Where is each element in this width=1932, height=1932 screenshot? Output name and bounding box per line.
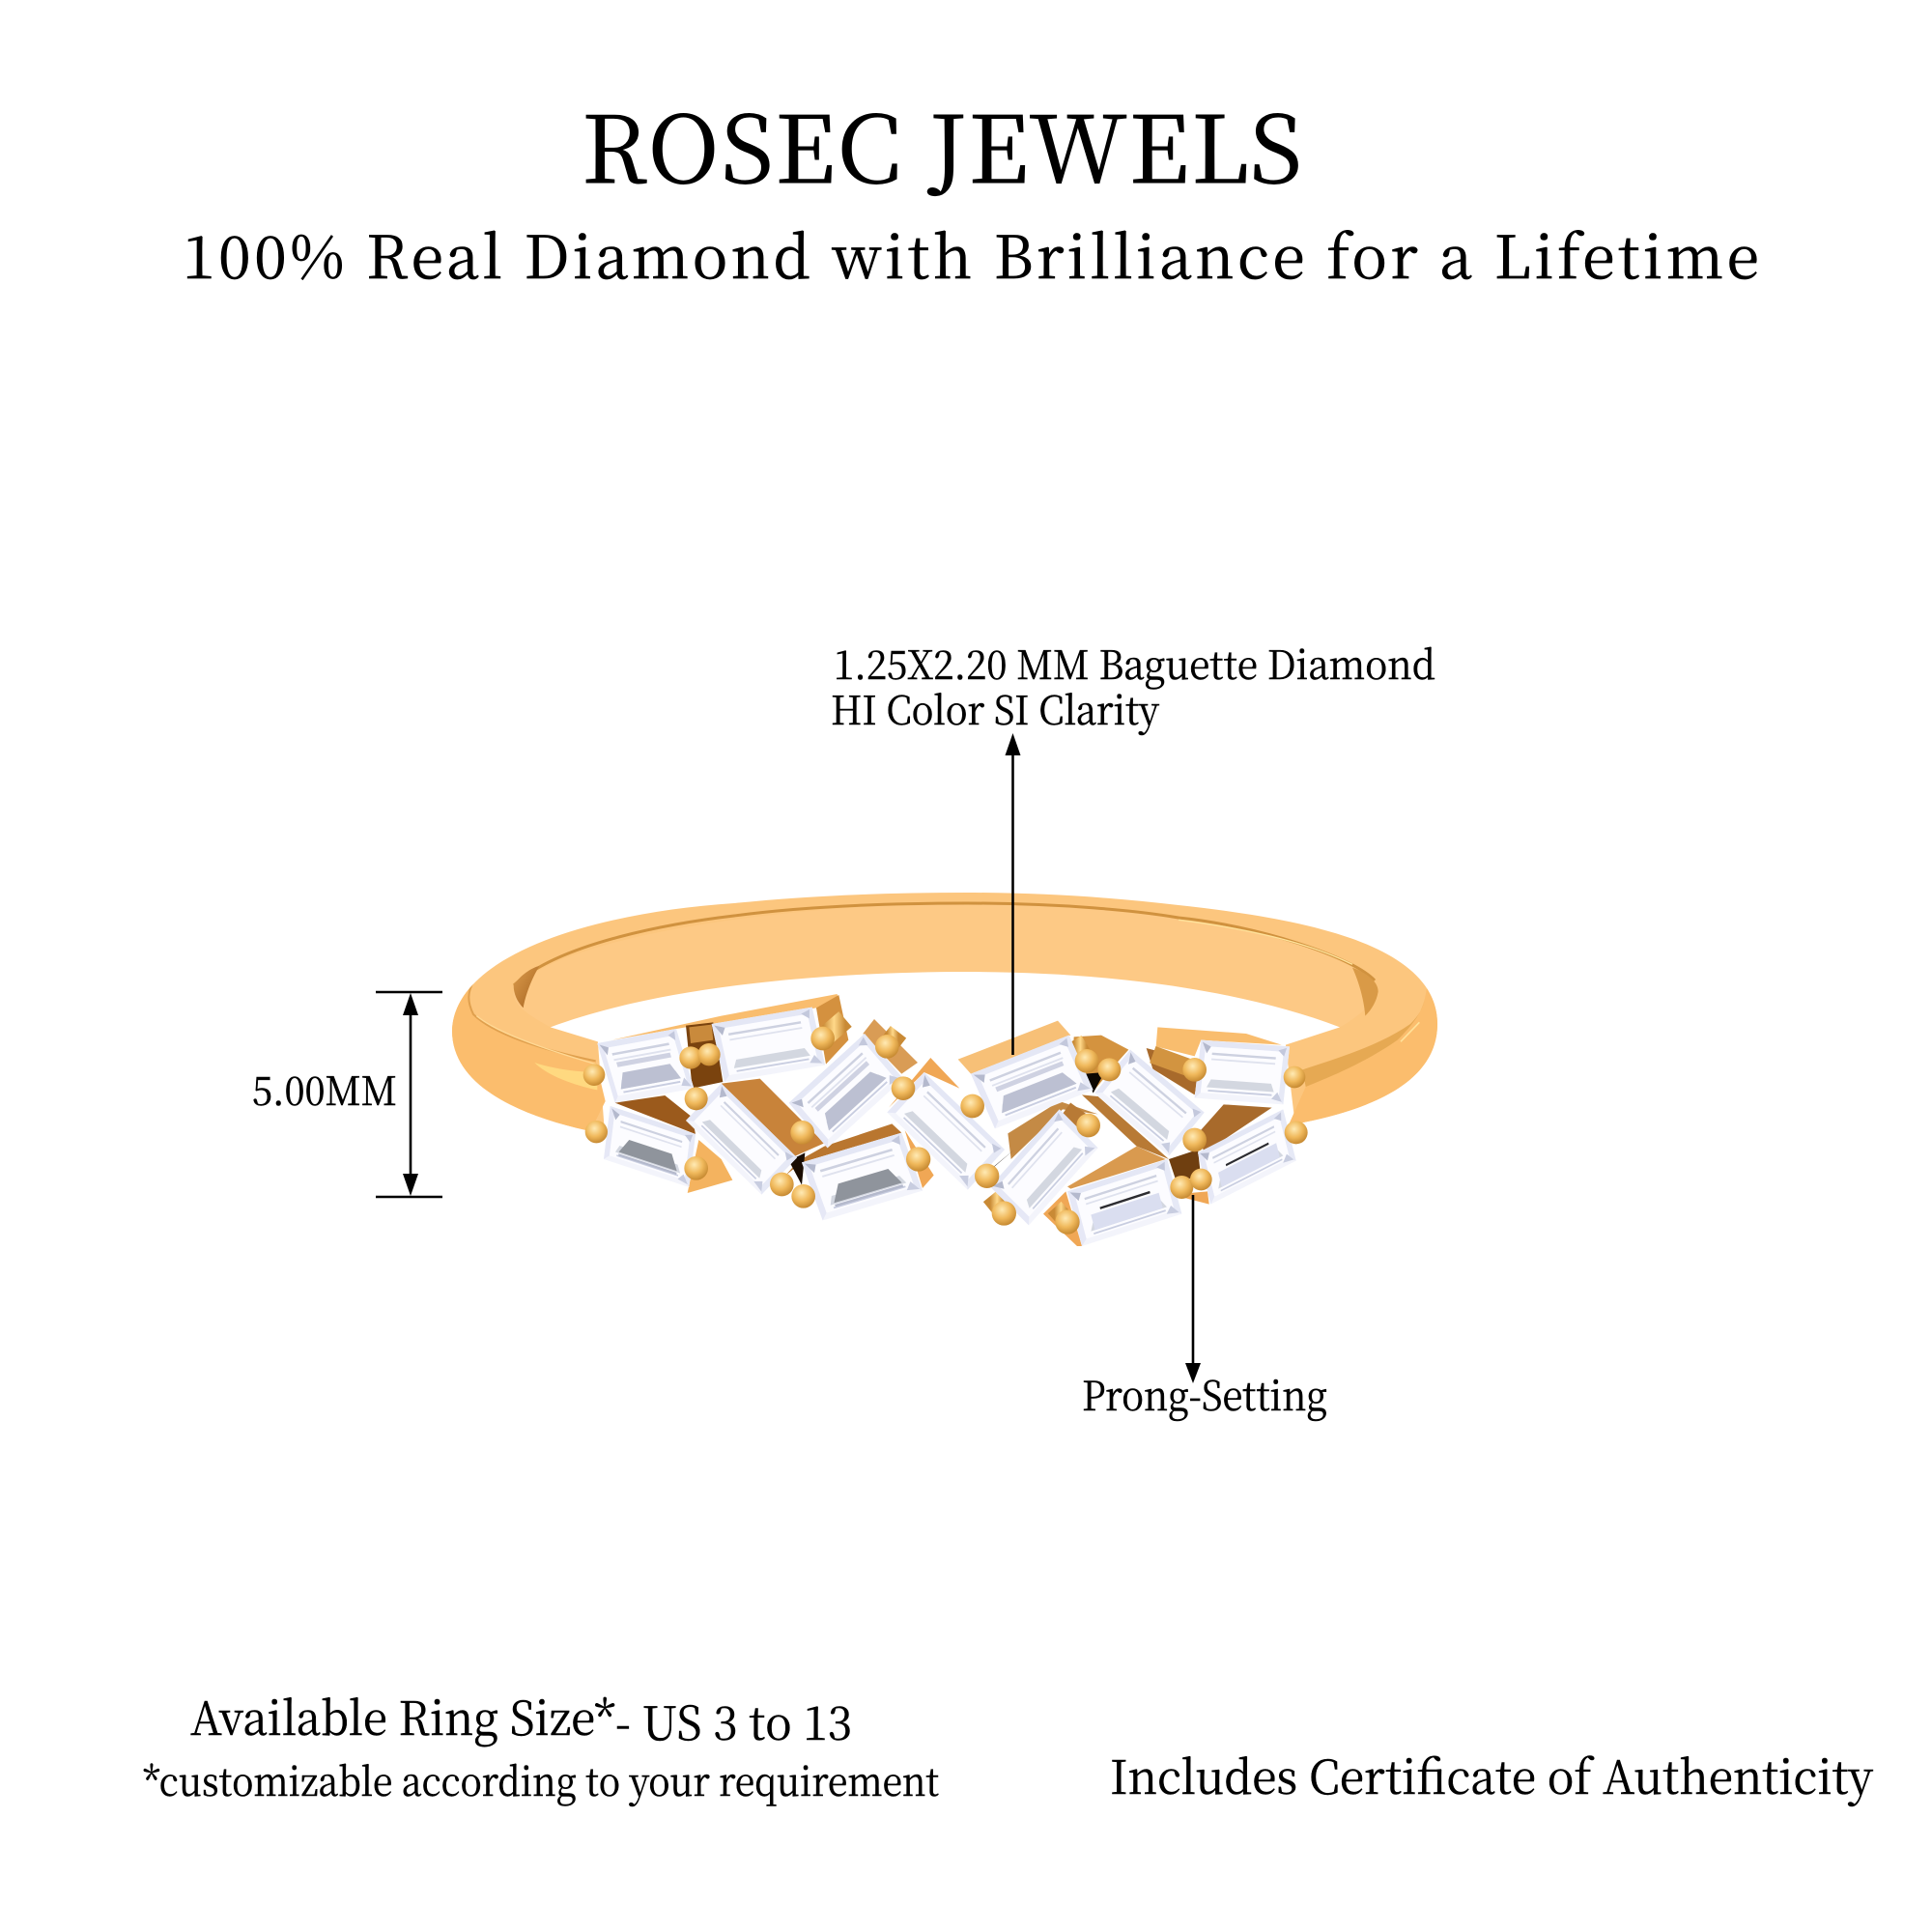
prongs, left [583,1027,930,1208]
arrow: to prong setting [1185,1195,1201,1383]
callout: baguette diamond specification: HI Color SI Clarity [831,679,1159,736]
left gemstone cluster [583,994,1005,1220]
ring size text: - US 3 to 13 [615,1687,852,1753]
band detail: right rim and inner wall [1179,920,1444,1133]
dimension bracket: ring height [376,992,442,1197]
diamond stones, left [597,1008,1005,1220]
prongs, right [960,1049,1308,1235]
ring band [446,893,1444,1140]
ring illustration [446,893,1444,1246]
label: ring height: 5.00MM [252,1060,397,1117]
ring size text [190,1682,852,1753]
callout: baguette diamond specification [831,634,1435,736]
right gemstone cluster [958,1021,1308,1246]
diamond stones, right [971,1036,1296,1246]
ring size text: Available Ring Size* [190,1682,615,1748]
footnote: customizable: *customizable according to your requirement [143,1750,939,1807]
band detail: left rim and inner wall [446,966,606,1140]
label: prong setting: Prong-Setting [1082,1365,1327,1423]
callout: baguette diamond specification: 1.25X2.20 MM Baguette Diamond [834,634,1435,691]
subtitle: 100% Real Diamond with Brilliance for a Lifetime [183,212,1759,296]
arrow: to baguette diamond [1005,733,1020,1055]
certificate note: Includes Certificate of Authenticity [1110,1741,1873,1807]
title: ROSEC JEWELS [582,77,1302,210]
